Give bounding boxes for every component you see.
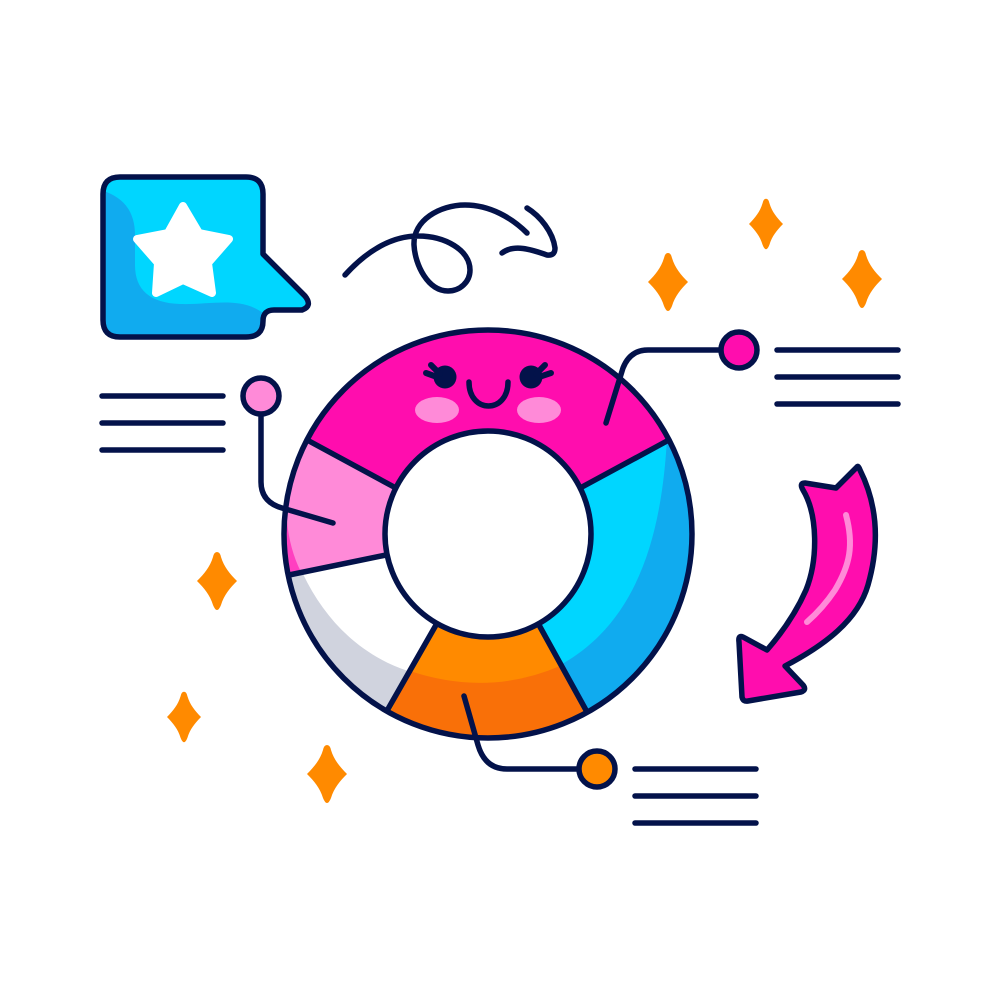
segment: orange (390, 627, 584, 736)
arrow: curly swirl (345, 205, 555, 291)
sparkles: bottom left (167, 552, 347, 803)
text lines (102, 396, 223, 450)
callout: magenta segment (606, 332, 898, 423)
eye: left (426, 365, 456, 388)
face (415, 365, 561, 423)
cheek: right (517, 397, 561, 423)
panel: speech bubble with star (95, 177, 308, 345)
callout: orange segment (464, 696, 756, 823)
segment: light pink (286, 444, 392, 572)
eye: right (520, 365, 551, 388)
callout: light pink segment (102, 378, 333, 523)
chart outlines (284, 330, 692, 738)
text lines (635, 769, 756, 823)
segment: white and grey (292, 575, 407, 708)
donut chart (275, 322, 720, 745)
segment: magenta (310, 332, 666, 484)
icon: star (137, 206, 229, 293)
smile (469, 382, 508, 406)
text lines (777, 350, 898, 404)
sparkles: top right (648, 199, 882, 311)
infographic illustration (99, 174, 901, 826)
segment: cyan (542, 444, 690, 708)
cheek: left (415, 397, 459, 423)
arrow: curved magenta (739, 466, 875, 701)
